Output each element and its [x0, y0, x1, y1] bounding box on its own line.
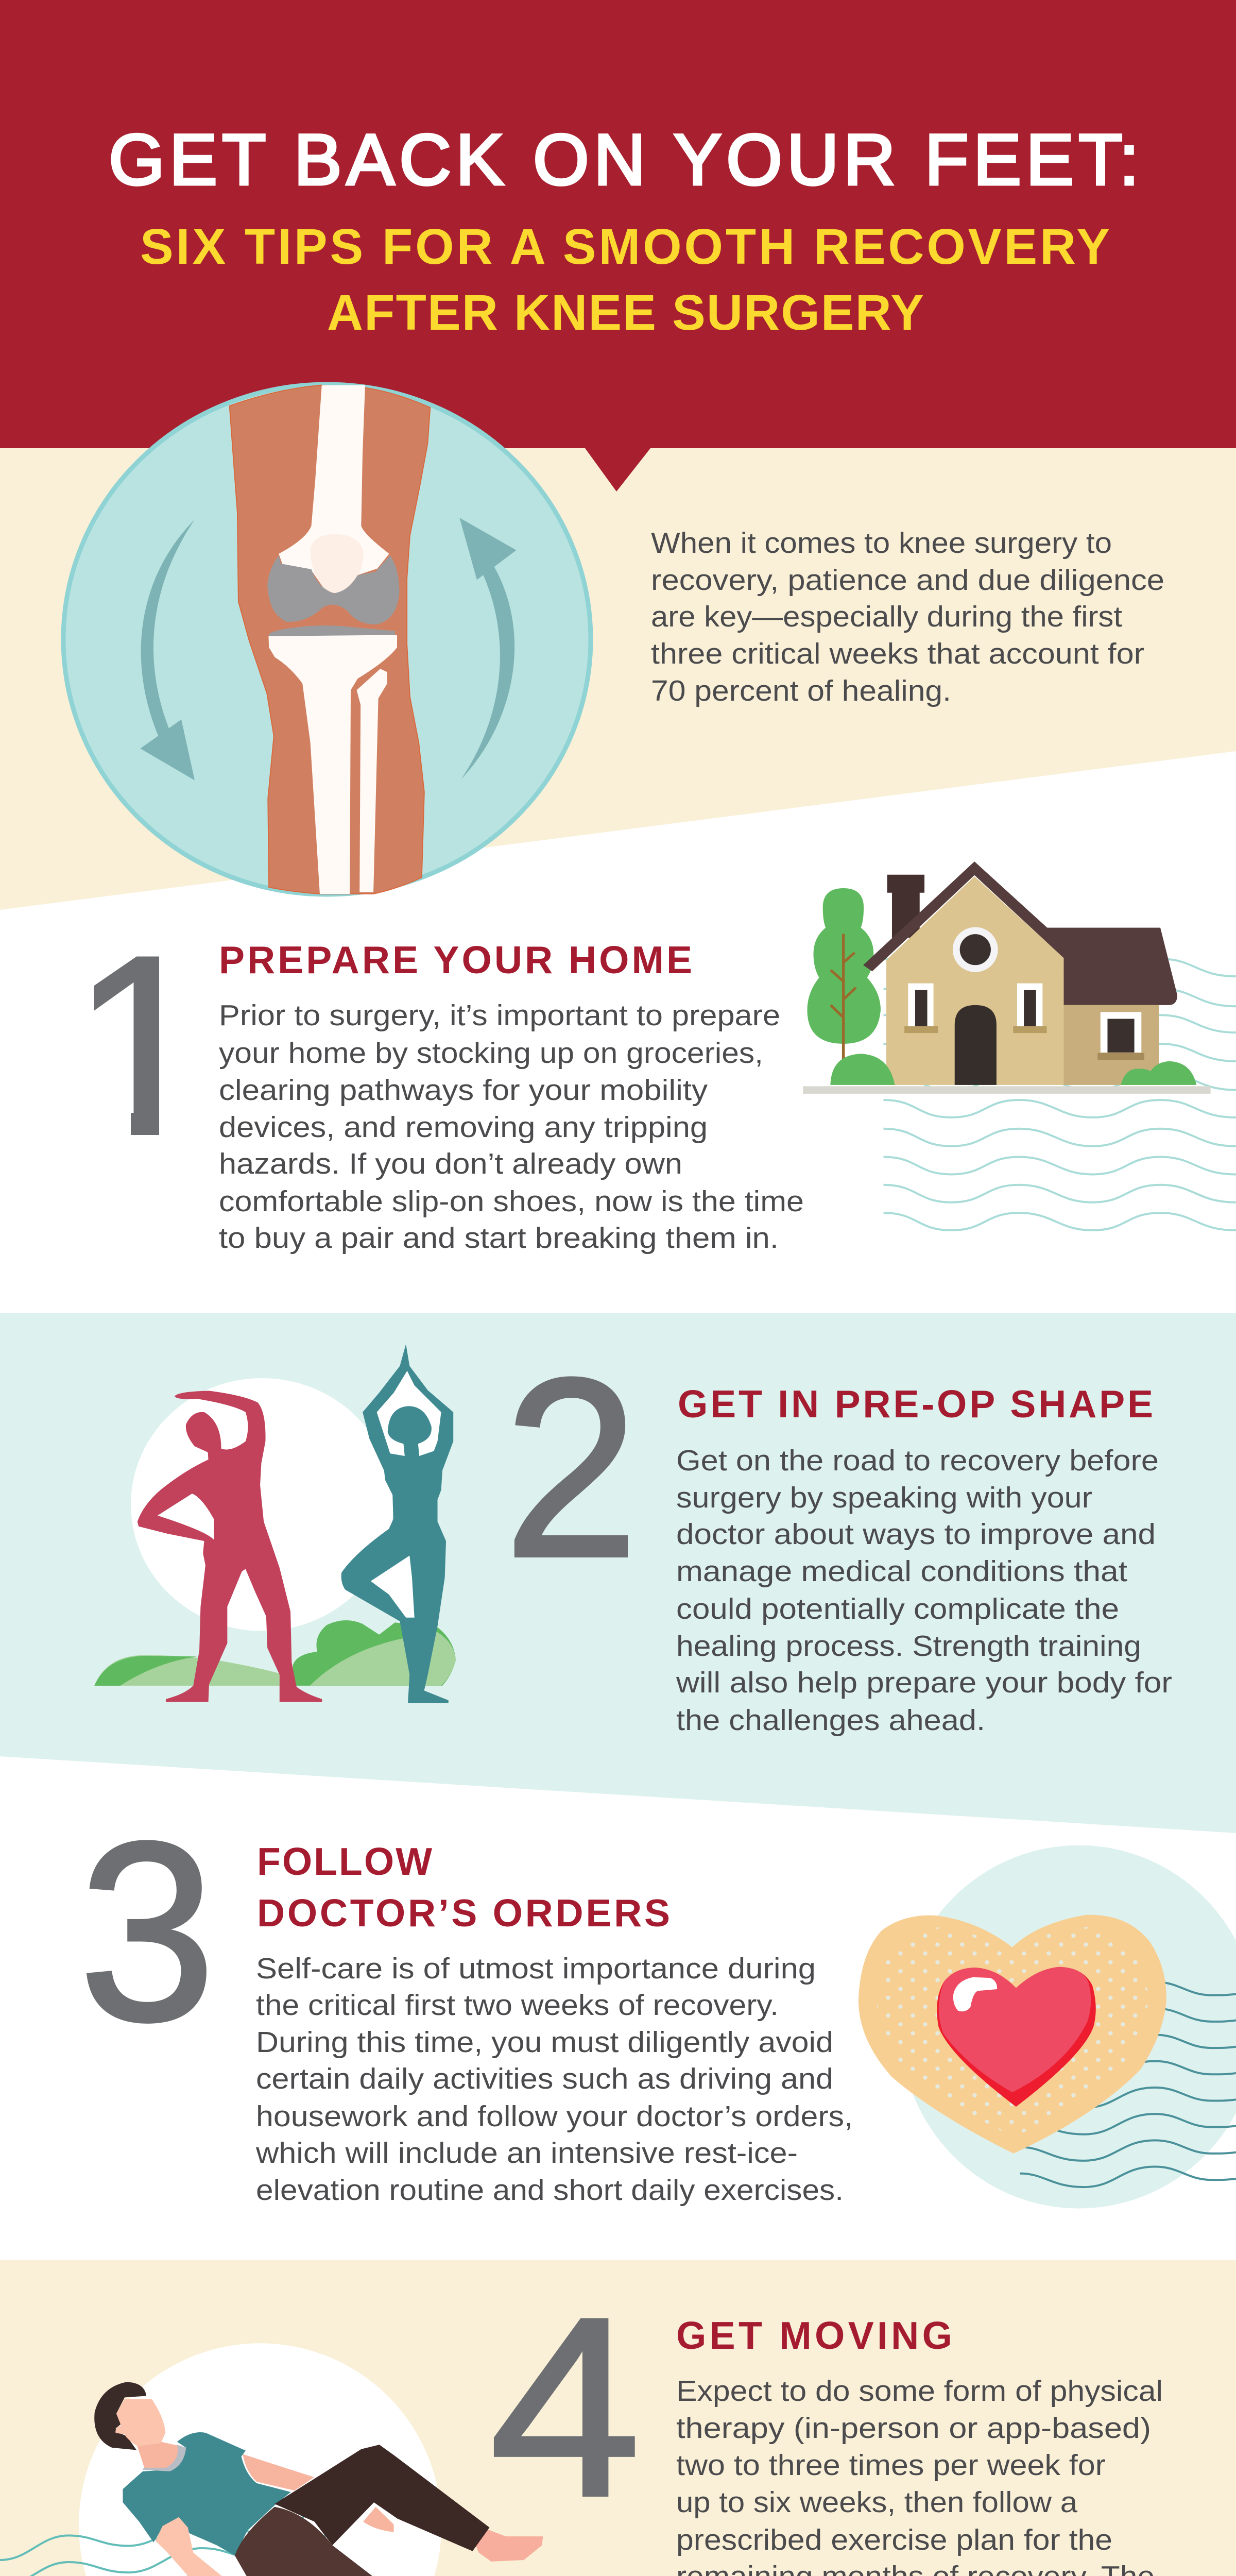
left hill — [94, 1655, 280, 1686]
icon: house with tree and waves — [803, 861, 1236, 1230]
heart highlight — [953, 1977, 997, 2011]
header band — [0, 0, 1236, 448]
windows and sills — [908, 984, 1141, 1053]
body text: two to three times per week for — [676, 2449, 1106, 2482]
right bush — [293, 1620, 456, 1686]
collar — [143, 2445, 186, 2471]
neck — [138, 2442, 181, 2468]
body text: doctor about ways to improve and — [676, 1518, 1156, 1551]
title — [109, 119, 1139, 341]
heading: DOCTOR’S ORDERS — [257, 1891, 670, 1935]
hair — [94, 2382, 146, 2450]
number 4: 4 — [489, 2264, 641, 2549]
bandage — [859, 1915, 1166, 2154]
arrows: range of motion — [140, 518, 517, 781]
teal figure — [341, 1344, 453, 1703]
panel: tip 4 background — [0, 2260, 1236, 2576]
chimney — [887, 875, 924, 938]
body text: will also help prepare your body for — [676, 1666, 1172, 1699]
intro text: three critical weeks that account for — [651, 637, 1144, 670]
wing wall — [1063, 1005, 1159, 1085]
heading: PREPARE YOUR HOME — [219, 938, 692, 981]
panel: intro background — [0, 448, 1236, 910]
subtitle: AFTER KNEE SURGERY — [327, 284, 924, 341]
bushes — [830, 1054, 1196, 1085]
panel: tip 2 background — [0, 1313, 1236, 1833]
body text: prescribed exercise plan for the — [676, 2523, 1112, 2556]
intro text: When it comes to knee surgery to — [651, 527, 1112, 560]
panel: tip 4 get moving — [0, 2264, 1164, 2576]
shirt — [123, 2432, 291, 2555]
icon: exercising figures — [94, 1344, 456, 1703]
subtitle: SIX TIPS FOR A SMOOTH RECOVERY — [140, 218, 1110, 275]
body text: up to six weeks, then follow a — [676, 2486, 1077, 2519]
number 3: 3 — [79, 1789, 216, 2074]
patella — [311, 534, 364, 593]
intro text: are key—especially during the first — [651, 600, 1122, 633]
icon: man doing leg exercise — [0, 2343, 543, 2576]
intro text — [651, 527, 1164, 707]
panel: tip 3 follow doctor's orders — [79, 1789, 1236, 2209]
body text: the challenges ahead. — [676, 1704, 985, 1737]
white ellipse — [79, 2343, 441, 2576]
red figure — [138, 1391, 322, 1702]
raised leg — [274, 2445, 490, 2551]
heading: FOLLOW — [257, 1840, 432, 1883]
body text — [219, 999, 804, 1255]
body text: to buy a pair and start breaking them in. — [219, 1222, 779, 1255]
far foot — [473, 2528, 543, 2562]
tibia and fibula — [268, 635, 397, 894]
body text: devices, and removing any tripping — [219, 1111, 708, 1144]
ground — [803, 1086, 1211, 1094]
round window — [953, 927, 998, 972]
body text: certain daily activities such as driving and — [256, 2062, 833, 2095]
bandage dots — [877, 1927, 1148, 2137]
body text: comfortable slip-on shoes, now is the time — [219, 1185, 804, 1218]
panel: tip 1 prepare your home — [71, 861, 1236, 1255]
header pointer triangle — [585, 448, 650, 492]
body text — [255, 1952, 853, 2207]
door — [955, 1005, 997, 1085]
body text: healing process. Strength training — [676, 1630, 1141, 1663]
main wall — [886, 876, 1063, 1085]
roof trim — [863, 861, 1088, 972]
far limbs — [243, 2454, 394, 2532]
body text: which will include an intensive rest-ice- — [255, 2137, 798, 2170]
body text: housework and follow your doctor’s orders, — [256, 2100, 853, 2133]
near arm — [156, 2517, 294, 2576]
teal figure gaps — [371, 1371, 441, 1618]
body text: manage medical conditions that — [676, 1555, 1127, 1588]
femur — [279, 385, 389, 591]
knee muscle — [230, 385, 430, 894]
body text: could potentially complicate the — [676, 1592, 1119, 1625]
body text: your home by stocking up on groceries, — [219, 1037, 763, 1070]
body text: clearing pathways for your mobility — [219, 1074, 708, 1107]
heading — [257, 1840, 670, 1935]
body text: Expect to do some form of physical — [676, 2375, 1163, 2408]
face — [115, 2399, 165, 2446]
icon: heart bandage — [859, 1845, 1236, 2209]
red heart — [937, 1967, 1096, 2107]
body text: therapy (in-person or app-based) — [676, 2412, 1151, 2445]
heading: GET IN PRE-OP SHAPE — [678, 1382, 1153, 1426]
subtitle — [140, 218, 1110, 341]
white circle — [131, 1378, 393, 1631]
intro text: recovery, patience and due diligence — [651, 564, 1164, 597]
body text: surgery by speaking with your — [676, 1481, 1092, 1514]
tree — [807, 888, 881, 1060]
icon: knee joint in circle — [63, 384, 591, 894]
body text: During this time, you must diligently avoid — [256, 2026, 833, 2059]
body text: the critical first two weeks of recovery. — [256, 1989, 779, 2022]
body text: Get on the road to recovery before — [676, 1444, 1159, 1477]
heading: GET MOVING — [676, 2314, 952, 2357]
title: GET BACK ON YOUR FEET: — [109, 119, 1139, 200]
near leg — [235, 2507, 486, 2576]
body text: Prior to surgery, it’s important to prepare — [219, 999, 780, 1032]
body text: elevation routine and short daily exercises. — [256, 2174, 844, 2207]
panel: tip 2 get in pre-op shape — [94, 1325, 1172, 1737]
body text — [676, 2375, 1164, 2576]
body text: hazards. If you don’t already own — [219, 1147, 682, 1180]
body text — [676, 1444, 1172, 1737]
intro text: 70 percent of healing. — [651, 674, 951, 707]
wing roof — [1046, 928, 1177, 1005]
cartilage — [267, 555, 400, 637]
number 1: 1 — [71, 903, 213, 1188]
number 2: 2 — [504, 1325, 639, 1610]
body text: Self-care is of utmost importance during — [256, 1952, 816, 1985]
